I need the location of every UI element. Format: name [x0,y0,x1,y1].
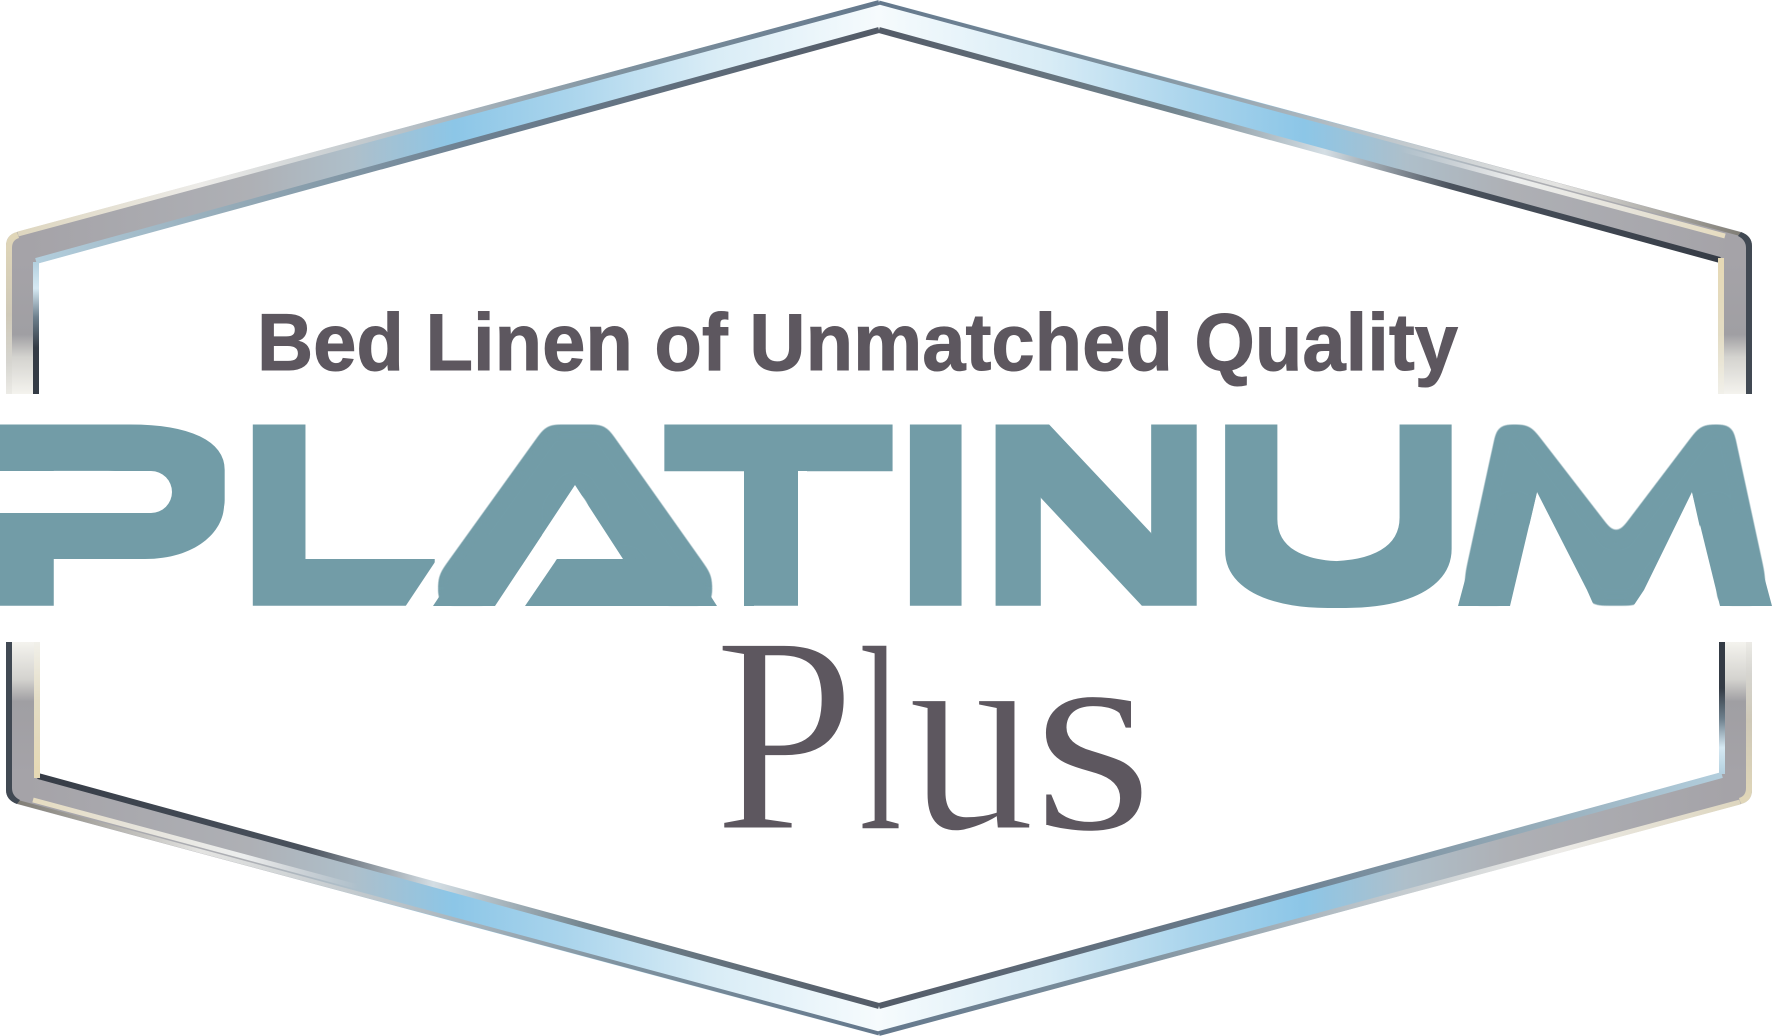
wordmark: PLATINUM: U [1206,392,1471,638]
wordmark: PLATINUM: I [886,392,986,638]
wordmark: Plus: s [1032,579,1154,891]
frame: bottom half of hexagon [6,642,1752,1036]
wordmark: Plus: P [714,579,855,891]
wordmark: PLATINUM: L [231,391,438,638]
frame: top half of hexagon [6,0,1752,394]
wordmark: Plus: l [859,592,902,886]
wordmark: PLATINUM: A [446,392,706,638]
wordmark: Plus [714,579,1154,891]
tagline: Bed Linen of Unmatched Quality [257,298,1458,388]
wordmark: Plus: u [908,579,1035,891]
wordmark: PLATINUM: N [978,392,1214,638]
wordmark: PLATINUM [0,424,1772,608]
wordmark: PLATINUM: T [665,391,892,638]
